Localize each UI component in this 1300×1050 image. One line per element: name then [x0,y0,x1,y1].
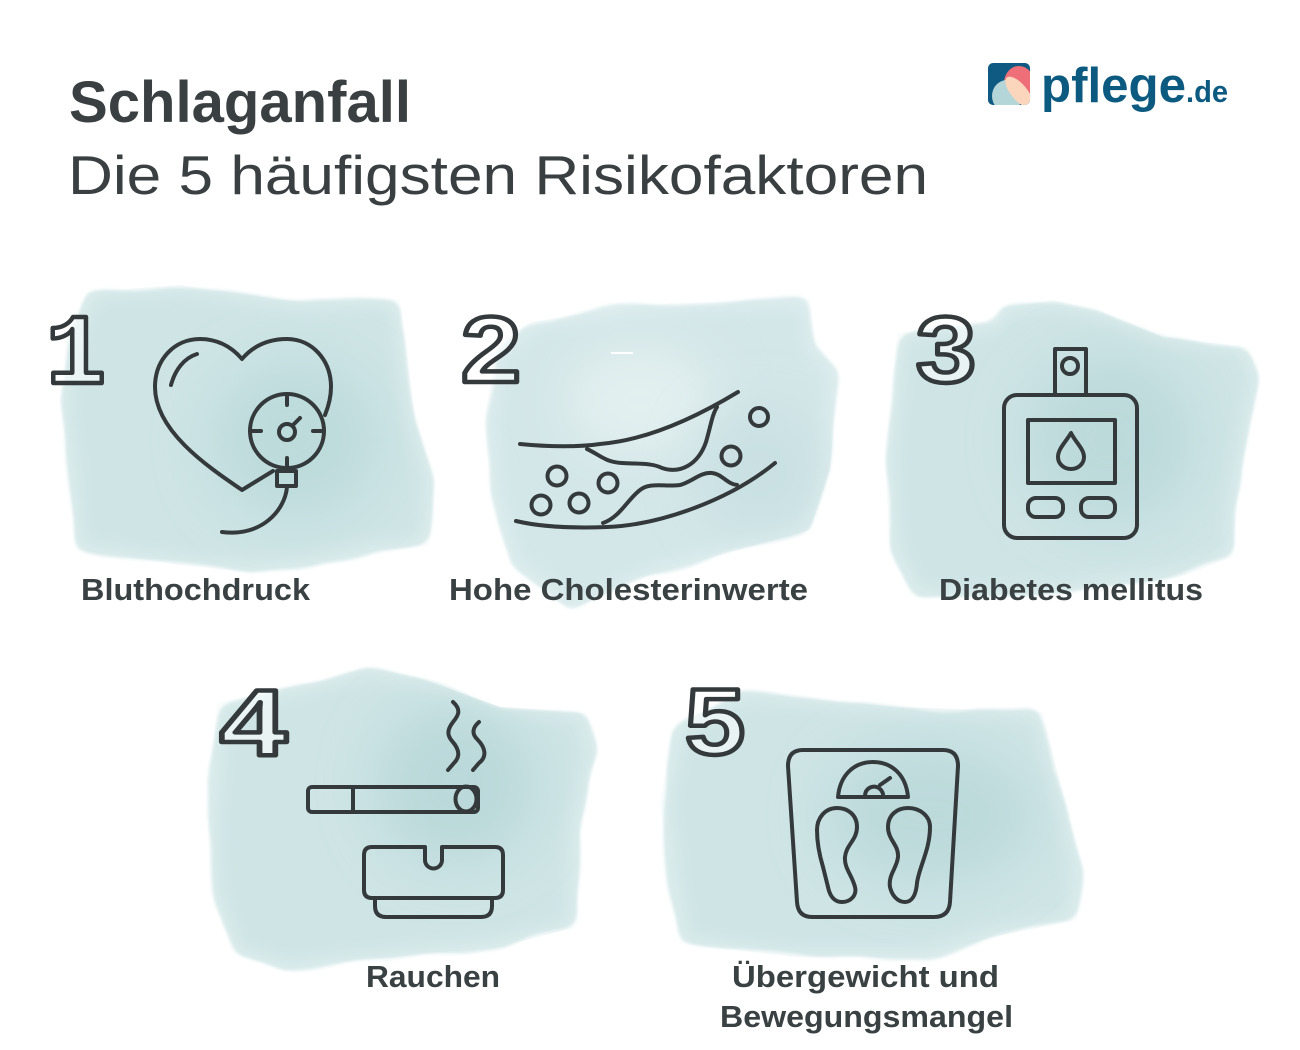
label: Hohe Cholesterinwerte [449,572,808,607]
watercolor wash 2 [485,298,838,610]
icon: cigarette and ashtray [308,702,503,917]
number 2: 2 [461,297,521,402]
label: Bluthochdruck [81,572,311,607]
title [68,70,928,206]
label: Übergewicht und [732,959,999,994]
title: Schlaganfall [69,70,411,135]
panel: Rauchen [208,667,597,994]
label [720,959,1013,1034]
logo wordmark: pflege.de [1041,59,1228,113]
label: Bewegungsmangel [720,999,1013,1034]
label: Rauchen [366,959,500,994]
watercolor wash 4 [208,667,597,970]
panel: Hohe Cholesterinwerte [449,297,838,610]
icon: heart with blood pressure gauge [155,339,331,533]
icon: blood glucose meter [1004,349,1137,538]
icon: bathroom scale with footprints [788,750,958,917]
panel: Übergewicht und Bewegungsmangel [660,669,1083,1034]
panel: Diabetes mellitus [885,297,1260,607]
logo: pflege.de [988,59,1228,113]
icon: logo mark [988,63,1030,105]
panel: Bluthochdruck [46,285,435,607]
watercolor wash 1 [60,285,435,572]
number 1: 1 [46,301,106,414]
number 3: 3 [916,297,976,402]
icon: clogged artery [516,392,775,527]
subtitle: Die 5 häufigsten Risikofaktoren [68,144,928,206]
number 4: 4 [220,670,287,775]
watercolor wash 3 [885,300,1260,598]
number 5: 5 [685,669,745,774]
watercolor wash 5 [660,692,1083,957]
label: Diabetes mellitus [939,572,1203,607]
